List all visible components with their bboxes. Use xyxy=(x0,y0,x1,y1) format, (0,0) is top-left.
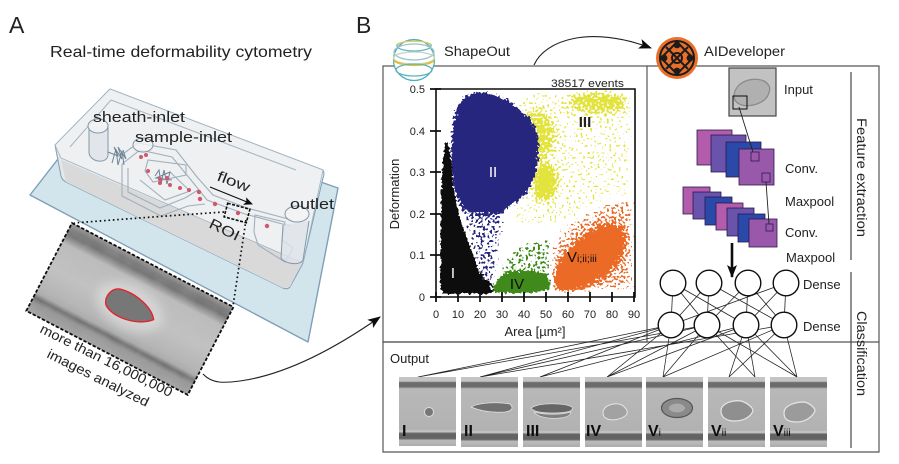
x tick labels: 90 xyxy=(628,309,640,321)
cluster labels: I xyxy=(451,265,455,282)
output image I: I xyxy=(402,423,406,440)
output image Vii xyxy=(708,377,765,447)
panel label A: A xyxy=(9,12,25,38)
y tick labels: 0.5 xyxy=(410,84,425,96)
arrow from ShapeOut to AIDeveloper xyxy=(534,37,651,65)
label: flow: flow xyxy=(215,169,253,196)
y tick labels: 0.4 xyxy=(410,126,425,138)
flow arrow xyxy=(210,187,252,204)
layer labels: Maxpool xyxy=(786,250,835,265)
frame: AIDeveloper panel xyxy=(647,66,879,342)
output image III xyxy=(523,377,580,447)
dense layer neurons xyxy=(658,270,799,338)
label: Feature extraction: Feature extraction xyxy=(854,118,869,237)
panel label B: B xyxy=(356,12,371,38)
label: sample-inlet: sample-inlet xyxy=(135,130,232,146)
cluster labels: II xyxy=(489,164,497,181)
frame: ShapeOut panel xyxy=(383,66,647,342)
scatter chart xyxy=(387,78,640,339)
cluster labels: IV xyxy=(510,276,524,293)
bracket: feature extraction xyxy=(850,72,852,260)
arrow from images to scatter plot xyxy=(203,317,380,382)
x axis title: Area [µm²] xyxy=(505,324,565,339)
network connections xyxy=(671,283,786,325)
x tick labels xyxy=(433,309,640,321)
frame: Output panel xyxy=(383,342,879,452)
cluster III yellow xyxy=(505,89,634,230)
label: ShapeOut: ShapeOut xyxy=(444,44,510,59)
x tick labels: 80 xyxy=(606,309,618,321)
layer labels: Maxpool xyxy=(785,194,834,209)
ROI cell image xyxy=(26,223,233,395)
cluster I black xyxy=(440,135,500,294)
label: Input: Input xyxy=(784,82,813,97)
caption: images analyzed: images analyzed xyxy=(45,346,152,410)
panel A: microfluidic chip illustration xyxy=(30,89,338,342)
label: Classification: Classification xyxy=(854,311,869,396)
x tick labels: 10 xyxy=(452,309,464,321)
output image Viii: Viii xyxy=(773,423,791,440)
label: AIDeveloper: AIDeveloper xyxy=(704,44,786,59)
y tick labels: 0.1 xyxy=(410,250,425,262)
y tick labels xyxy=(410,84,425,304)
microfluidic channels xyxy=(120,143,293,262)
y tick labels: 0.2 xyxy=(410,209,425,221)
layer labels: Dense xyxy=(803,319,841,334)
y tick labels: 0.3 xyxy=(410,167,425,179)
layer labels: Dense xyxy=(803,277,841,292)
cluster labels: III xyxy=(579,114,591,131)
x tick labels: 20 xyxy=(474,309,486,321)
x tick labels: 0 xyxy=(433,309,439,321)
cluster labels xyxy=(451,114,597,293)
label: ROI: ROI xyxy=(206,216,242,245)
layer labels: Conv. xyxy=(785,225,818,240)
chip body xyxy=(55,89,324,289)
layer labels xyxy=(785,161,841,334)
icon: AIDeveloper logo xyxy=(656,37,698,79)
y tick labels: 0 xyxy=(419,292,425,304)
label: outlet: outlet xyxy=(290,197,334,213)
segmented cell with red contour xyxy=(101,284,160,331)
feature maps: maxpool and second convolution xyxy=(683,187,777,247)
bracket: classification xyxy=(850,272,852,448)
output image Vi xyxy=(646,377,703,447)
output image III: III xyxy=(526,423,539,440)
inlet and outlet wells xyxy=(88,119,309,264)
caption: images analyzed: more than 16,000,000 xyxy=(38,321,175,400)
output image IV xyxy=(585,377,642,447)
output image II xyxy=(461,377,518,447)
label: sheath-inlet: sheath-inlet xyxy=(93,110,185,126)
arrow to dense layers xyxy=(731,243,733,277)
axes xyxy=(436,89,635,297)
network output connections xyxy=(418,325,797,377)
icon: ShapeOut globe xyxy=(394,40,434,80)
output image I xyxy=(399,377,456,446)
output image IV: IV xyxy=(586,423,601,440)
event count: 38517 events xyxy=(551,78,625,90)
x tick labels: 30 xyxy=(496,309,508,321)
label: Output: Output xyxy=(390,351,429,366)
cluster labels: Vi;ii;iii xyxy=(567,249,597,266)
input image xyxy=(729,68,776,116)
glass slide xyxy=(30,105,338,342)
title: Real-time deformability cytometry xyxy=(50,44,312,61)
cluster II blue xyxy=(451,92,539,290)
receptive field connector lines xyxy=(739,107,769,224)
output image II: II xyxy=(464,423,473,440)
ROI zoom dotted lines xyxy=(74,212,246,306)
y axis title: Deformation xyxy=(387,159,402,229)
x tick labels: 50 xyxy=(540,309,552,321)
cluster IV green xyxy=(492,238,552,294)
x tick labels: 60 xyxy=(562,309,574,321)
output image Vi: Vi xyxy=(648,423,661,440)
output image Vii: Vii xyxy=(711,423,726,440)
x tick labels: 70 xyxy=(584,309,596,321)
ROI box xyxy=(224,203,250,223)
red cells xyxy=(139,153,269,228)
feature maps: first convolution xyxy=(697,130,774,185)
output image Viii xyxy=(770,377,827,447)
layer labels: Conv. xyxy=(785,161,818,176)
x tick labels: 40 xyxy=(518,309,530,321)
filters in channels xyxy=(108,147,172,184)
cluster V orange xyxy=(550,197,635,293)
